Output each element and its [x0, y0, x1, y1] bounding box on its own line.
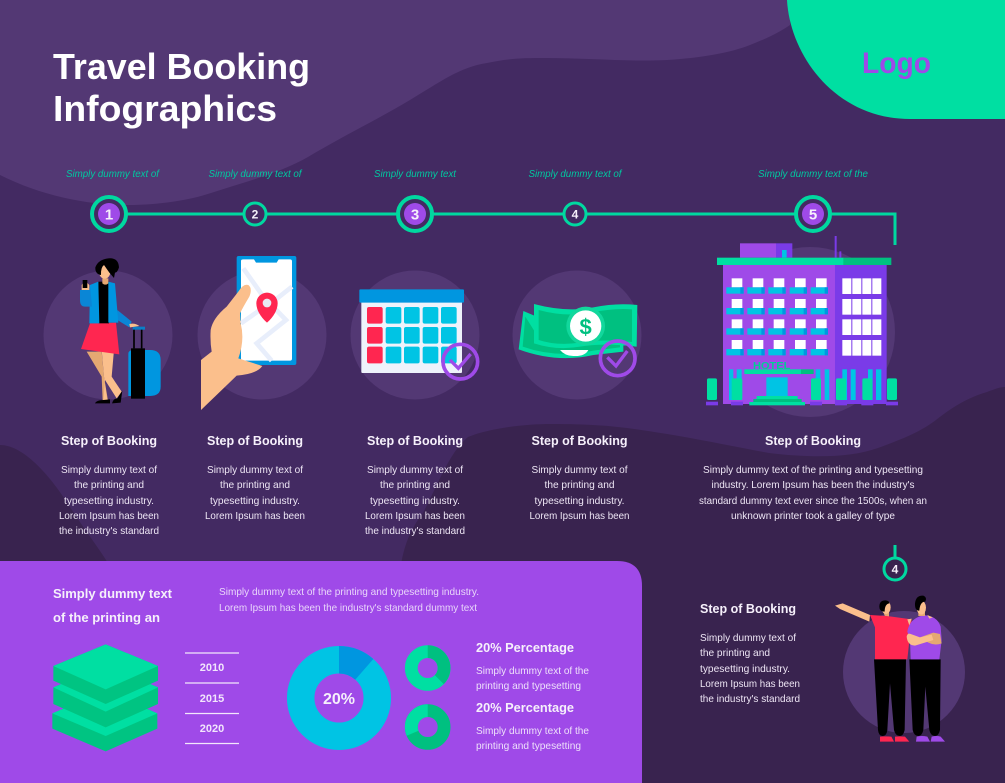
bottom step text — [700, 601, 800, 705]
bottom step text: Step of Booking — [700, 601, 796, 616]
step 4 text: Simply dummy text of — [532, 464, 628, 476]
bottom step text: Lorem Ipsum has been — [700, 678, 800, 690]
icon: layered stack — [52, 644, 158, 751]
step 1 text: Simply dummy text of — [61, 464, 157, 476]
step captions: Simply dummy text of the — [758, 168, 868, 180]
step 3 text: the printing and — [380, 479, 450, 491]
bottom step marker 4: 4 — [892, 562, 899, 576]
step marker 2 — [244, 203, 266, 225]
step marker 1: 1 — [105, 206, 113, 224]
percentage note 2 — [476, 700, 589, 752]
bottom step marker 4 — [884, 545, 906, 580]
step 5 text: unknown printer took a galley of type — [731, 510, 895, 522]
logo: Logo — [862, 47, 931, 80]
percentage note 1: 20% Percentage — [476, 640, 574, 655]
step 2 text: typesetting industry. — [210, 495, 300, 507]
step 3 text: Step of Booking — [367, 433, 463, 448]
step 5 text: Simply dummy text of the printing and typesetting — [703, 464, 923, 476]
step marker 4 — [564, 203, 586, 225]
step 2 text: the printing and — [220, 479, 290, 491]
year scale — [185, 653, 239, 744]
step marker 5: 5 — [809, 206, 817, 224]
step 5 text — [699, 433, 927, 522]
bottom step text: the printing and — [700, 647, 770, 659]
bottom step text: typesetting industry. — [700, 663, 790, 675]
step 2 text — [205, 433, 305, 522]
step captions: Simply dummy text of — [208, 168, 302, 180]
panel heading — [53, 586, 173, 625]
step 5 text: Step of Booking — [765, 433, 861, 448]
step 5 text: industry. Lorem Ipsum has been the industry's — [712, 479, 914, 491]
step 3 text: typesetting industry. — [370, 495, 460, 507]
percentage note 2: Simply dummy text of the — [476, 725, 589, 737]
step 5 text: standard dummy text ever since the 1500s, when an — [699, 495, 927, 507]
step 1 text: the printing and — [74, 479, 144, 491]
step 4 text: typesetting industry. — [534, 495, 624, 507]
title — [53, 46, 310, 129]
step marker 5 — [796, 197, 830, 231]
donut chart: 20%: 20% — [323, 691, 355, 708]
percentage note 1: printing and typesetting — [476, 680, 581, 692]
step 3 text — [365, 433, 465, 537]
title: Infographics — [53, 88, 277, 129]
step 4 text: Lorem Ipsum has been — [530, 510, 630, 522]
icon: traveller with suitcase — [44, 258, 172, 403]
step 4 text: the printing and — [544, 479, 615, 491]
panel heading: of the printing an — [53, 610, 160, 625]
step captions: Simply dummy text — [374, 168, 457, 180]
step marker 2: 2 — [252, 208, 259, 222]
timeline — [92, 197, 895, 245]
panel heading: Simply dummy text — [53, 586, 173, 601]
percentage note 1 — [476, 640, 589, 692]
step 3 text: the industry's standard — [365, 525, 465, 537]
step 1 text: Lorem Ipsum has been — [59, 510, 159, 522]
step 3 text: Simply dummy text of — [367, 464, 463, 476]
icon: phone map in hand — [198, 256, 326, 410]
step marker 1 — [92, 197, 126, 231]
step 2 text: Step of Booking — [207, 433, 303, 448]
step 1 text — [59, 433, 159, 537]
step marker 3: 3 — [411, 206, 419, 224]
icon: two people pointing — [835, 596, 965, 742]
small donut 1 — [411, 645, 450, 684]
year scale: 2015 — [200, 693, 224, 705]
icon: hotel building: HOTEL — [753, 361, 790, 372]
icon: banknotes: $ — [580, 314, 592, 339]
year scale: 2020 — [200, 723, 224, 735]
step 2 text: Simply dummy text of — [207, 464, 303, 476]
step 1 text: typesetting industry. — [64, 495, 154, 507]
panel: purple statistics — [0, 561, 642, 783]
year scale: 2010 — [200, 662, 224, 674]
step marker 4: 4 — [572, 208, 579, 222]
step 4 text — [530, 433, 630, 522]
bottom step text: the industry's standard — [700, 693, 800, 705]
step marker 3 — [398, 197, 432, 231]
step 4 text: Step of Booking — [532, 433, 628, 448]
panel intro text: Simply dummy text of the printing and typesetting industry. — [219, 586, 479, 598]
panel intro text — [219, 586, 479, 614]
step 1 text: Step of Booking — [61, 433, 157, 448]
percentage note 2: 20% Percentage — [476, 700, 574, 715]
percentage note 1: Simply dummy text of the — [476, 665, 589, 677]
step captions: Simply dummy text of — [66, 168, 160, 180]
title: Travel Booking — [53, 46, 310, 87]
step captions — [66, 168, 868, 180]
step captions: Simply dummy text of — [528, 168, 622, 180]
icon: hotel building — [706, 236, 898, 417]
panel intro text: Lorem Ipsum has been the industry's standard dummy text — [219, 602, 477, 614]
icon: booking calendar — [350, 270, 480, 400]
bottom step text: Simply dummy text of — [700, 632, 796, 644]
step 2 text: Lorem Ipsum has been — [205, 510, 305, 522]
small donut 2 — [405, 704, 444, 743]
step 3 text: Lorem Ipsum has been — [365, 510, 465, 522]
logo blob — [787, 0, 1005, 119]
percentage note 2: printing and typesetting — [476, 740, 581, 752]
donut chart: 20% — [301, 646, 377, 736]
step 1 text: the industry's standard — [59, 525, 159, 537]
icon: banknotes — [512, 270, 642, 400]
